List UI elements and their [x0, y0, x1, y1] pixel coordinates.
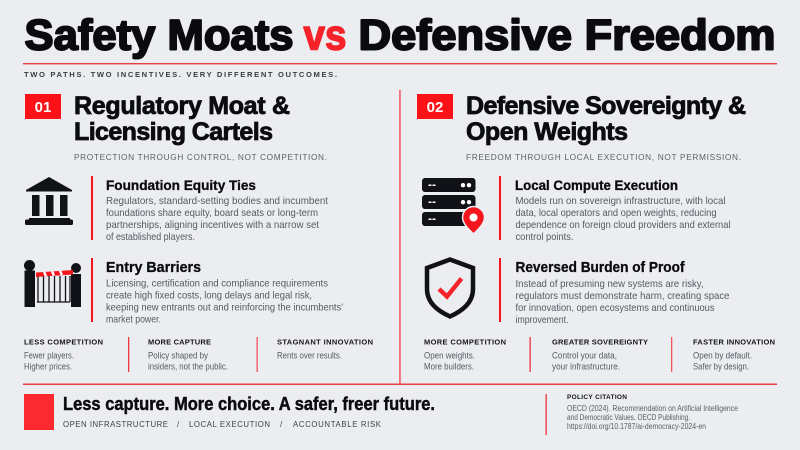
item: entry barriers: Entry Barriers: [106, 260, 201, 276]
item: foundation equity ties: Regulators, standard-setting bodies and incumbent: [106, 195, 328, 207]
closing headline: Less capture. More choice. A safer, freer future.: [63, 394, 435, 414]
stat: stagnant innovation: Rents over results.: [277, 350, 342, 360]
closing tags: ACCOUNTABLE RISK: [293, 420, 382, 429]
heading: defensive sovereignty: Open Weights: [466, 118, 628, 146]
icon: shield with check: [427, 260, 473, 316]
stat: greater sovereignty: GREATER SOVEREIGNTY: [552, 338, 648, 346]
stat: faster innovation: FASTER INNOVATION: [693, 338, 775, 346]
stat: less competition: LESS COMPETITION: [24, 338, 103, 346]
title: vs: [304, 12, 346, 60]
item: reversed burden of proof: [516, 260, 730, 326]
item: foundation equity ties: foundations share equity, board seats or long-term: [106, 207, 318, 219]
heading: regulatory moat: Licensing Cartels: [74, 118, 273, 146]
stat: greater sovereignty: [552, 338, 648, 372]
heading: regulatory moat: Regulatory Moat &: [74, 92, 290, 120]
stat: more competition: More builders.: [424, 362, 474, 372]
item: entry barriers: Licensing, certification and compliance requirements: [106, 278, 328, 290]
tagline: FREEDOM THROUGH LOCAL EXECUTION, NOT PERMISSION.: [466, 152, 741, 162]
item: local compute execution: Models run on sovereign infrastructure, with local: [516, 195, 726, 207]
stat: faster innovation: Safer by design.: [693, 362, 749, 372]
icon: barrier gate: [24, 260, 81, 307]
item: local compute execution: data, local operators and open weights, reducing: [516, 207, 717, 219]
stat: less competition: Fewer players.: [24, 350, 74, 360]
item: reversed burden of proof: improvement.: [516, 314, 568, 326]
policy citation: and Democratic Values. OECD Publishing.: [567, 413, 690, 422]
closing banner: [24, 394, 435, 430]
closing tags: [63, 420, 382, 429]
tagline: PROTECTION THROUGH CONTROL, NOT COMPETITION.: [74, 152, 327, 162]
stat: stagnant innovation: STAGNANT INNOVATION: [277, 338, 373, 346]
stat: less competition: Higher prices.: [24, 362, 72, 372]
subtitle: TWO PATHS. TWO INCENTIVES. VERY DIFFERENT OUTCOMES.: [24, 70, 337, 79]
icon: bank building: [25, 177, 73, 225]
stat: greater sovereignty: Control your data,: [552, 350, 617, 360]
stat: more competition: MORE COMPETITION: [424, 338, 506, 346]
policy citation: POLICY CITATION: [567, 394, 627, 401]
title: [24, 12, 776, 60]
badge 01: 01: [35, 99, 51, 116]
stat: more capture: [148, 338, 228, 372]
icon: red square: [24, 394, 54, 430]
stat: more competition: [424, 338, 506, 372]
stat: faster innovation: [693, 338, 775, 372]
closing tags: LOCAL EXECUTION: [189, 420, 270, 429]
item: foundation equity ties: partnerships, aligning incentives with a narrow set: [106, 219, 319, 231]
stat: greater sovereignty: your infrastructure.: [552, 362, 620, 372]
stat: more competition: Open weights.: [424, 350, 475, 360]
item: reversed burden of proof: for innovation, open ecosystems and continuous: [516, 302, 714, 314]
closing tags: /: [280, 420, 283, 429]
policy citation: [567, 394, 738, 431]
title: Defensive Freedom: [358, 12, 776, 60]
item: local compute execution: Local Compute Execution: [515, 177, 678, 193]
stat: faster innovation: Open by default.: [693, 350, 752, 360]
item: reversed burden of proof: Instead of presuming new systems are risky,: [516, 278, 704, 290]
item: reversed burden of proof: Reversed Burden of Proof: [516, 260, 685, 276]
badge 02: 02: [427, 99, 443, 116]
item: local compute execution: dependence on foreign cloud providers and external: [516, 219, 730, 231]
closing tags: OPEN INFRASTRUCTURE: [63, 420, 168, 429]
badge 01: [25, 94, 61, 119]
panel: regulatory moat: [24, 92, 373, 372]
stat: more capture: insiders, not the public.: [148, 362, 228, 372]
policy citation: OECD (2024). Recommendation on Artificial Intelligence: [567, 404, 738, 413]
item: local compute execution: [515, 177, 730, 243]
heading: defensive sovereignty: Defensive Sovereignty &: [466, 92, 746, 120]
title: Safety Moats: [24, 12, 294, 60]
panel: defensive sovereignty: [417, 92, 775, 372]
item: foundation equity ties: Foundation Equity Ties: [106, 177, 256, 193]
item: local compute execution: control points.: [516, 231, 574, 243]
stat: more capture: MORE CAPTURE: [148, 338, 211, 346]
item: reversed burden of proof: regulators must demonstrate harm, creating space: [516, 290, 730, 302]
item: entry barriers: [106, 260, 343, 326]
badge 02: [417, 94, 453, 119]
item: entry barriers: market power.: [106, 314, 161, 326]
item: foundation equity ties: of established players.: [106, 231, 195, 243]
item: foundation equity ties: [106, 177, 328, 243]
item: entry barriers: create high fixed costs, long delays and legal risk,: [106, 290, 312, 302]
stat: stagnant innovation: [277, 338, 373, 360]
stat: more capture: Policy shaped by: [148, 350, 208, 360]
icon: servers with location pin: [422, 178, 484, 234]
item: entry barriers: keeping new entrants out and reinforcing the incumbents': [106, 302, 343, 314]
policy citation: https://doi.org/10.1787/ai-democracy-2024-en: [567, 422, 706, 431]
stat: less competition: [24, 338, 103, 372]
closing tags: /: [177, 420, 180, 429]
